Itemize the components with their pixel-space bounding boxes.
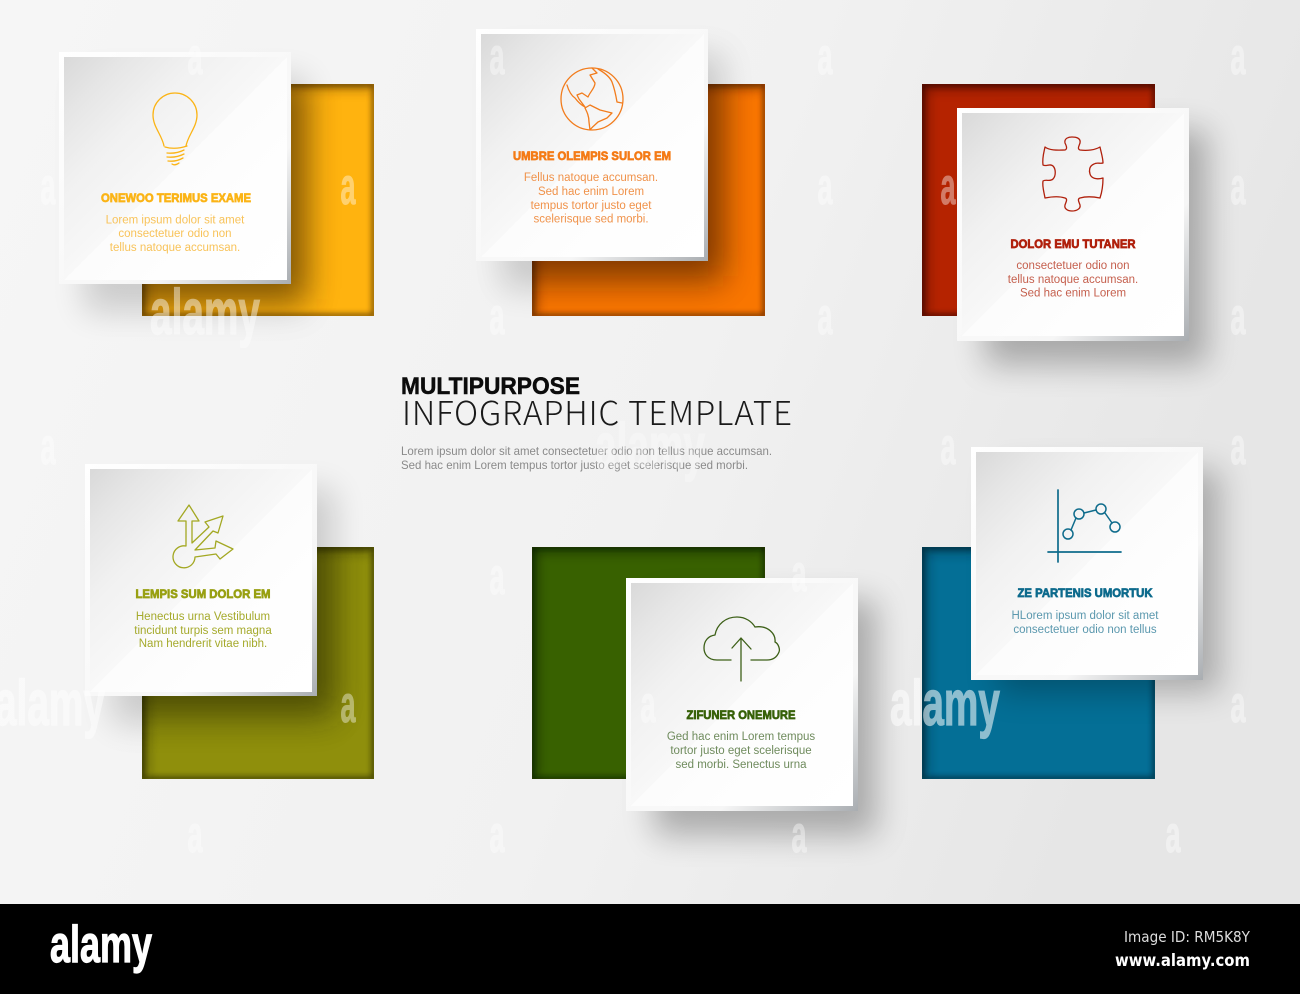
watermarks: a bbox=[40, 158, 56, 216]
watermarks: a bbox=[188, 28, 203, 86]
watermarks: a bbox=[1230, 158, 1246, 216]
watermarks: alamy bbox=[890, 667, 1000, 739]
olive recessed square bbox=[142, 547, 374, 779]
white card bbox=[476, 29, 708, 261]
yellow heading: ONEWOO TERIMUS EXAME bbox=[101, 191, 251, 205]
watermarks: a bbox=[340, 158, 356, 216]
olive body text bbox=[134, 611, 272, 650]
intro text: Sed hac enim Lorem tempus tortor justo eget scelerisque sed morbi. bbox=[401, 458, 748, 472]
icon: branching arrows bbox=[173, 505, 233, 568]
watermarks: a bbox=[188, 806, 203, 864]
watermarks: a bbox=[490, 806, 505, 864]
icon: light bulb bbox=[153, 93, 197, 165]
panel: blue chart block bbox=[922, 447, 1220, 779]
orange body text: scelerisque sed morbi. bbox=[533, 214, 649, 226]
blue body text bbox=[1012, 610, 1159, 636]
title: multipurpose: MULTIPURPOSE bbox=[401, 373, 580, 400]
watermarks: a bbox=[340, 676, 356, 734]
watermarks: a bbox=[40, 418, 56, 476]
watermarks: a bbox=[1230, 418, 1246, 476]
blue heading: ZE PARTENIS UMORTUK bbox=[1018, 586, 1153, 600]
red recessed square bbox=[922, 84, 1155, 316]
orange recessed square bbox=[532, 84, 765, 316]
watermarks: a bbox=[818, 28, 833, 86]
intro text: Lorem ipsum dolor sit amet consectetuer odio non tellus nque accumsan. bbox=[401, 444, 772, 458]
watermarks: a bbox=[1230, 28, 1246, 86]
green body text: tortor justo eget scelerisque bbox=[670, 745, 812, 757]
footer bar bbox=[0, 904, 1300, 994]
watermarks: a bbox=[818, 158, 833, 216]
watermarks: a bbox=[940, 418, 956, 476]
panel: orange globe block bbox=[476, 29, 765, 316]
red body text: Sed hac enim Lorem bbox=[1020, 288, 1126, 300]
green recessed square bbox=[532, 547, 765, 779]
yellow body text bbox=[106, 214, 245, 254]
blue body text: consectetuer odio non tellus bbox=[1013, 624, 1157, 636]
orange heading: UMBRE OLEMPIS SULOR EM bbox=[513, 149, 671, 163]
watermarks: a bbox=[490, 548, 505, 606]
green body text: sed morbi. Senectus urna bbox=[675, 759, 807, 771]
intro text bbox=[401, 444, 772, 472]
watermarks: alamy bbox=[0, 667, 105, 739]
red body text: tellus natoque accumsan. bbox=[1008, 274, 1138, 286]
red heading: DOLOR EMU TUTANER bbox=[1010, 237, 1136, 251]
white card bbox=[957, 108, 1189, 341]
panel: green cloud block bbox=[532, 547, 876, 835]
watermarks: a bbox=[1166, 548, 1181, 606]
white card bbox=[59, 52, 291, 284]
olive body text: tincidunt turpis sem magna bbox=[134, 625, 272, 637]
white card bbox=[626, 578, 858, 811]
website: www.alamy.com bbox=[1115, 951, 1250, 971]
watermarks: a bbox=[818, 288, 833, 346]
panel: red puzzle block bbox=[922, 84, 1207, 365]
icon: puzzle piece bbox=[1043, 137, 1103, 211]
green body text bbox=[667, 731, 815, 771]
title: infographic template: INFOGRAPHIC TEMPLATE bbox=[402, 387, 792, 435]
red card shadow bbox=[985, 130, 1207, 365]
image id: Image ID: RM5K8Y bbox=[1124, 928, 1251, 946]
watermarks: a bbox=[940, 158, 956, 216]
white card bbox=[971, 447, 1203, 680]
icon: globe bbox=[561, 68, 623, 130]
olive heading: LEMPIS SUM DOLOR EM bbox=[136, 587, 271, 601]
blue recessed square bbox=[922, 547, 1155, 779]
watermarks: a bbox=[490, 288, 505, 346]
olive body text: Nam hendrerit vitae nibh. bbox=[139, 638, 267, 650]
watermarks: a bbox=[792, 806, 807, 864]
yellow recessed square bbox=[142, 84, 374, 316]
watermarks: a bbox=[1230, 288, 1246, 346]
icon: cloud upload bbox=[704, 617, 779, 681]
watermarks: a bbox=[490, 28, 505, 86]
watermarks: a bbox=[1166, 806, 1181, 864]
icon: line chart bbox=[1048, 490, 1121, 562]
watermarks: alamy bbox=[595, 410, 705, 482]
blue card shadow bbox=[998, 470, 1220, 692]
yellow body text: tellus natoque accumsan. bbox=[110, 242, 240, 254]
orange card shadow bbox=[501, 54, 723, 289]
title block bbox=[401, 373, 792, 472]
orange body text: Sed hac enim Lorem bbox=[538, 186, 644, 198]
yellow body text: consectetuer odio non bbox=[118, 228, 232, 240]
red body text: consectetuer odio non bbox=[1016, 260, 1130, 272]
olive body text: Henectus urna Vestibulum bbox=[136, 611, 270, 623]
orange body text bbox=[524, 172, 658, 226]
yellow card shadow bbox=[84, 77, 306, 312]
olive card shadow bbox=[112, 489, 334, 724]
watermarks: alamy bbox=[150, 276, 260, 348]
orange body text: Fellus natoque accumsan. bbox=[524, 172, 658, 184]
white card bbox=[85, 464, 317, 696]
green card shadow bbox=[654, 600, 876, 835]
alamy logo: alamy bbox=[50, 916, 152, 974]
green body text: Ged hac enim Lorem tempus bbox=[667, 731, 815, 743]
red body text bbox=[1008, 260, 1138, 300]
watermarks: a bbox=[1230, 676, 1246, 734]
blue body text: HLorem ipsum dolor sit amet bbox=[1012, 610, 1159, 622]
watermarks: a bbox=[792, 545, 807, 603]
orange body text: tempus tortor justo eget bbox=[531, 200, 652, 212]
panel: olive arrows block bbox=[85, 464, 374, 779]
yellow body text: Lorem ipsum dolor sit amet bbox=[106, 214, 245, 226]
green heading: ZIFUNER ONEMURE bbox=[686, 708, 796, 722]
panel: yellow idea block bbox=[59, 52, 374, 316]
watermarks: a bbox=[640, 676, 656, 734]
